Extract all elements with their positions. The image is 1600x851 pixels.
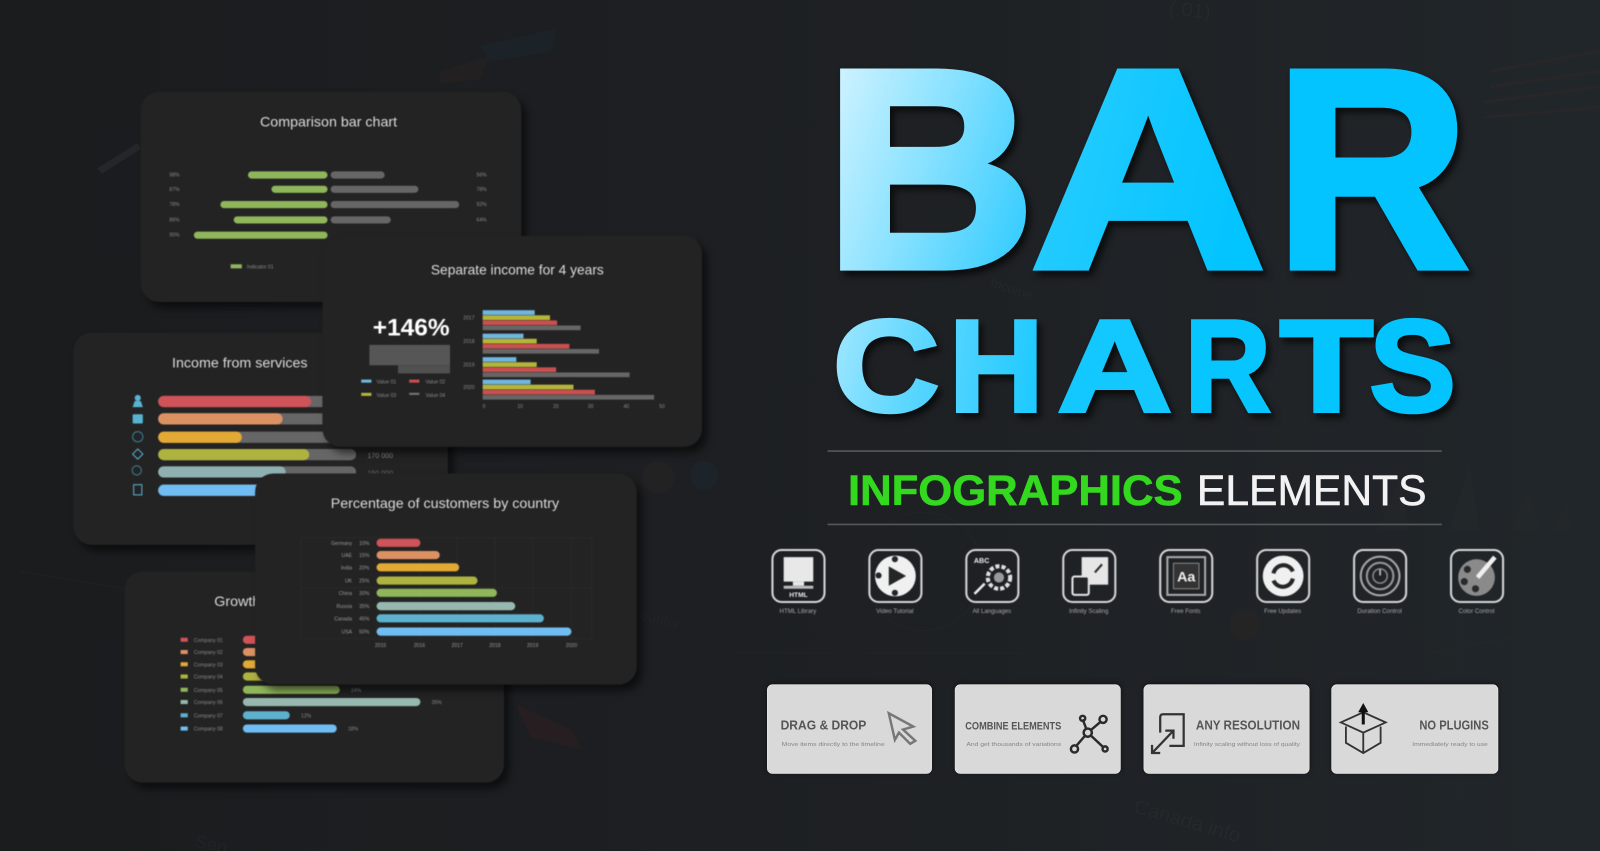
title: BAR: A: [1031, 11, 1266, 327]
title: CHARTS: C: [833, 292, 940, 439]
panel: combine elements: And get thousands of variations: [966, 742, 1062, 748]
chart: country bars: 2015: [375, 643, 386, 649]
chart: company bars: Company 08: [194, 727, 223, 733]
chart: country bars: UK: [345, 579, 353, 585]
background: country: [632, 606, 682, 633]
chart: country bars: UAE: [342, 553, 353, 559]
panel: no plugins: [1332, 685, 1498, 773]
chart: country bars: 2020: [566, 643, 577, 649]
icon: html library: HTML Library: [780, 608, 817, 615]
heading: income from services: Income from services: [172, 355, 308, 371]
panel: combine elements: COMBINE ELEMENTS: [965, 721, 1062, 733]
chart: progress bars: 170 000: [367, 452, 393, 460]
panel: growth chart: [124, 571, 504, 783]
background: Income: [989, 274, 1035, 303]
chart: country bars: 2016: [414, 643, 425, 649]
heading: comparison bar chart: Comparison bar chart: [260, 115, 397, 131]
panel: any resolution: Infinity scaling without loss of quality: [1194, 742, 1300, 748]
icon: free fonts: Free Fonts: [1171, 608, 1200, 615]
panel: separate income for 4 years: [322, 236, 702, 447]
icon: resize arrow: [1152, 714, 1184, 753]
chart: mirrored green and grey bars: 95%: [169, 233, 180, 239]
chart: grouped horizontal bars: 2020: [463, 385, 475, 391]
panel: drag and drop: [767, 685, 932, 773]
title: CHARTS: R: [1185, 293, 1271, 439]
chart: grouped horizontal bars: 20: [553, 404, 559, 410]
legend: indicator 01: [231, 264, 274, 270]
chart: grouped horizontal bars: [463, 310, 665, 410]
chart: country bars: [301, 538, 592, 649]
panel: drag and drop: Move items directly to the timeline: [782, 742, 885, 748]
legend: values: Value 02: [426, 380, 445, 386]
icon: html library: [772, 550, 824, 615]
chart: company bars: Company 06: [194, 700, 223, 706]
icon: box with arrow: [1341, 703, 1386, 753]
chart: mirrored green and grey bars: 98%: [169, 173, 180, 179]
chart: company bars: 12%: [301, 713, 312, 719]
chart: company bars: 18%: [348, 727, 359, 733]
chart: mirrored green and grey bars: 78%: [477, 187, 487, 193]
icon: infinity scaling: Infinity Scaling: [1069, 608, 1108, 615]
panel: percentage of customers by country: [255, 473, 637, 685]
icon: color control: Color Control: [1459, 608, 1495, 615]
icon: all languages: All Languages: [972, 608, 1011, 615]
icon: color control: [1451, 550, 1503, 615]
chart: progress bars: [158, 396, 393, 496]
panel: any resolution: [1144, 685, 1309, 773]
chart: country bars: China: [339, 591, 352, 597]
legend: values: Value 01: [377, 380, 396, 386]
text block: description: [369, 345, 450, 373]
chart: mirrored green and grey bars: [169, 171, 487, 239]
chart: mirrored green and grey bars: 92%: [477, 202, 487, 208]
chart: company bars: Company 03: [194, 662, 223, 668]
title: CHARTS: [833, 292, 1456, 440]
title: CHARTS: H: [949, 292, 1044, 439]
panel: combine elements: [955, 685, 1120, 773]
chart: company bars: Company 02: [194, 650, 223, 656]
legend: indicator 01: Indicator 01: [247, 264, 274, 270]
chart: country bars: 50%: [359, 630, 370, 636]
chart: country bars: 45%: [359, 616, 370, 622]
title: BAR: [824, 11, 1468, 328]
icon: connected nodes: [1071, 716, 1108, 753]
chart: mirrored green and grey bars: 56%: [477, 173, 487, 179]
subtitle: infographics elements: [828, 451, 1442, 524]
legend: values: [361, 380, 445, 399]
chart: country bars: USA: [342, 630, 353, 636]
stat: +146%: +146%: [373, 315, 450, 342]
icon: video tutorial: [869, 550, 921, 615]
panel: drag and drop: DRAG & DROP: [781, 718, 866, 733]
title: BAR: B: [824, 11, 1035, 327]
title: CHARTS: A: [1057, 293, 1172, 439]
chart: company bars: 24%: [351, 688, 362, 694]
chart: country bars: 2018: [489, 643, 501, 649]
icons: service symbols: [132, 395, 143, 495]
panel: no plugins: NO PLUGINS: [1419, 718, 1489, 733]
chart: grouped horizontal bars: 30: [588, 404, 594, 410]
subtitle: infographics elements: INFOGRAPHICS: [848, 467, 1183, 515]
icon: free updates: Free Updates: [1264, 608, 1301, 615]
chart: country bars: 2017: [451, 643, 463, 649]
chart: country bars: 20%: [359, 565, 370, 571]
chart: country bars: Russia: [336, 604, 352, 610]
icon: free fonts: [1160, 550, 1212, 615]
title: BAR: R: [1276, 12, 1468, 328]
chart: company bars: Company 04: [194, 675, 223, 681]
chart: company bars: Company 05: [194, 688, 223, 694]
chart: company bars: [181, 636, 442, 733]
chart: country bars: Canada: [334, 616, 352, 622]
panel: income from services: [73, 333, 448, 545]
icon: free fonts: Aa: [1177, 570, 1196, 586]
chart: company bars: Company 01: [194, 638, 223, 644]
chart: grouped horizontal bars: 2017: [463, 315, 475, 321]
chart: grouped horizontal bars: 50: [659, 404, 665, 410]
panel: comparison bar chart: [141, 92, 521, 302]
title: CHARTS: T: [1280, 294, 1373, 440]
chart: mirrored green and grey bars: 86%: [169, 217, 180, 223]
chart: country bars: 10%: [359, 541, 370, 547]
background: Canada info: [1131, 796, 1243, 847]
chart: mirrored green and grey bars: 64%: [477, 217, 487, 223]
chart: grouped horizontal bars: 2019: [463, 362, 475, 368]
legend: values: Value 03: [377, 393, 396, 399]
icon: infinity scaling: [1063, 550, 1115, 615]
chart: country bars: 2019: [527, 643, 538, 649]
icon: cursor: [889, 713, 915, 744]
legend: values: Value 04: [426, 393, 445, 399]
icon row: features: [772, 550, 1503, 615]
chart: country bars: 15%: [359, 553, 370, 559]
chart: company bars: Company 07: [194, 713, 223, 719]
chart: grouped horizontal bars: 2018: [463, 339, 475, 345]
panel: no plugins: Immediately ready to use: [1412, 742, 1488, 748]
chart: progress bars: 150 000: [367, 469, 393, 477]
chart: country bars: India: [341, 565, 352, 571]
chart: company bars: 35%: [432, 700, 442, 706]
icon: html library: HTML: [789, 592, 808, 599]
icon: all languages: ABC: [974, 557, 989, 565]
chart: mirrored green and grey bars: 78%: [169, 202, 180, 208]
title: CHARTS: S: [1369, 293, 1456, 439]
icon: video tutorial: Video Tutorial: [876, 608, 914, 615]
icon: duration control: [1354, 550, 1406, 615]
icon: all languages: [966, 550, 1018, 615]
icon: duration control: Duration Control: [1357, 608, 1402, 615]
chart: country bars: 30%: [359, 591, 370, 597]
heading: separate income: Separate income for 4 years: [431, 262, 604, 277]
chart: grouped horizontal bars: 40: [623, 404, 629, 410]
heading: growth: Growth: [214, 594, 260, 610]
panel: any resolution: ANY RESOLUTION: [1196, 718, 1300, 733]
icon: free updates: [1257, 550, 1309, 615]
chart: grouped horizontal bars: 10: [517, 404, 523, 410]
chart: country bars: 25%: [359, 579, 370, 585]
chart: country bars: Germany: [331, 541, 352, 547]
chart: mirrored green and grey bars: 87%: [169, 187, 180, 193]
subtitle: infographics elements: ELEMENTS: [1197, 467, 1427, 515]
chart: country bars: 35%: [359, 604, 370, 610]
chart: grouped horizontal bars: 0: [483, 404, 486, 410]
heading: percentage of customers: Percentage of customers by country: [331, 496, 560, 512]
